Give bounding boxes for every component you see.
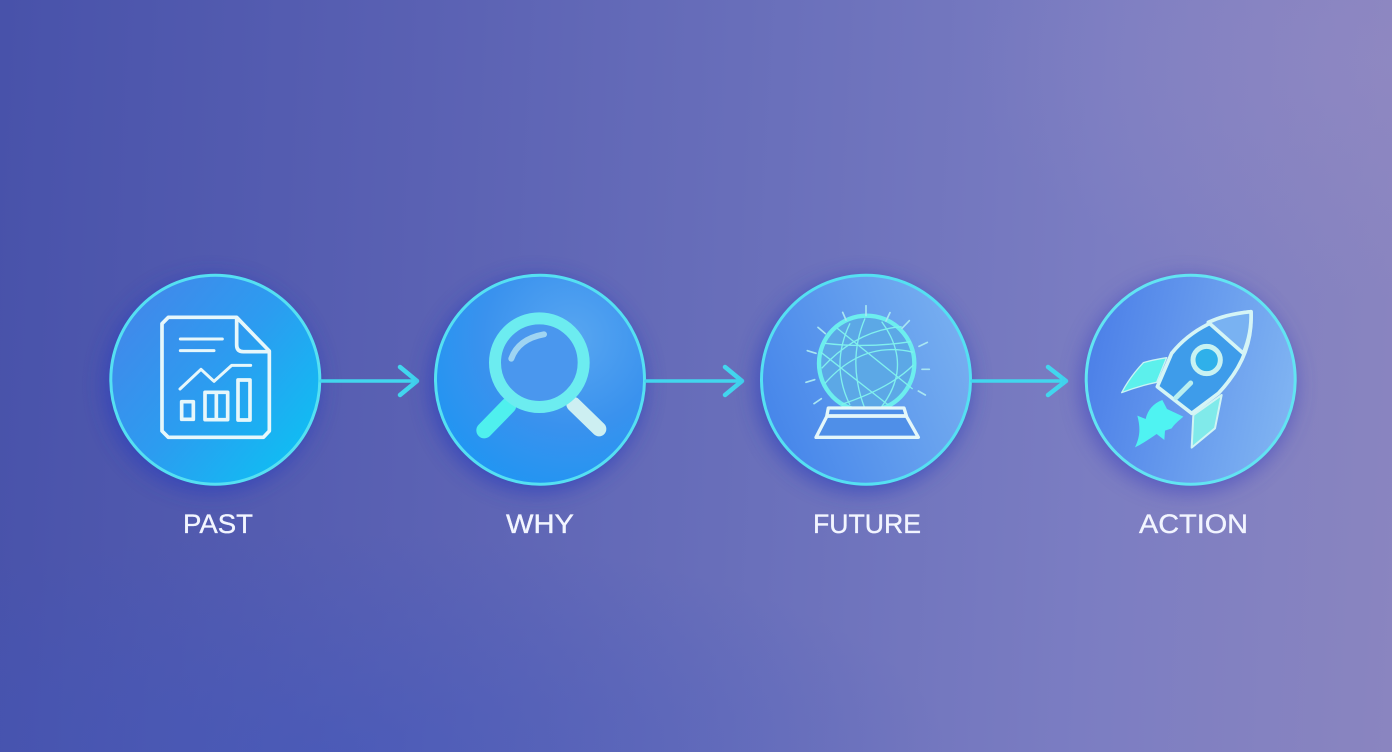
- globe: [819, 316, 914, 411]
- step: past: [104, 275, 320, 539]
- flame: [1135, 400, 1183, 447]
- circle: future: [762, 275, 970, 484]
- left fin: [1122, 358, 1167, 393]
- porthole: [1193, 346, 1220, 374]
- nose cone: [1208, 312, 1251, 353]
- label: why: WHY: [506, 509, 574, 539]
- icon: crystal ball: [806, 306, 929, 437]
- arrow: past to why: [321, 367, 417, 395]
- label: future: FUTURE: [813, 509, 921, 539]
- rays: [806, 306, 929, 404]
- stand: [816, 408, 918, 437]
- circle: why: [436, 275, 644, 484]
- circle: action: [1086, 275, 1295, 484]
- right fin: [1192, 395, 1222, 448]
- step: future: [755, 275, 971, 539]
- label: past: PAST: [183, 509, 253, 539]
- icon: magnifying glass: [484, 318, 599, 430]
- hatch line: [1176, 383, 1191, 398]
- arrow: why to future: [646, 367, 742, 395]
- rocket body: [1157, 312, 1251, 413]
- circle: past: [111, 275, 320, 484]
- arrow: future to action: [972, 367, 1066, 395]
- step: action: [1080, 275, 1296, 539]
- step: why: [429, 275, 645, 539]
- icon: rocket: [1122, 312, 1251, 448]
- icon: document with chart: [162, 317, 269, 437]
- label: action: ACTION: [1139, 509, 1248, 539]
